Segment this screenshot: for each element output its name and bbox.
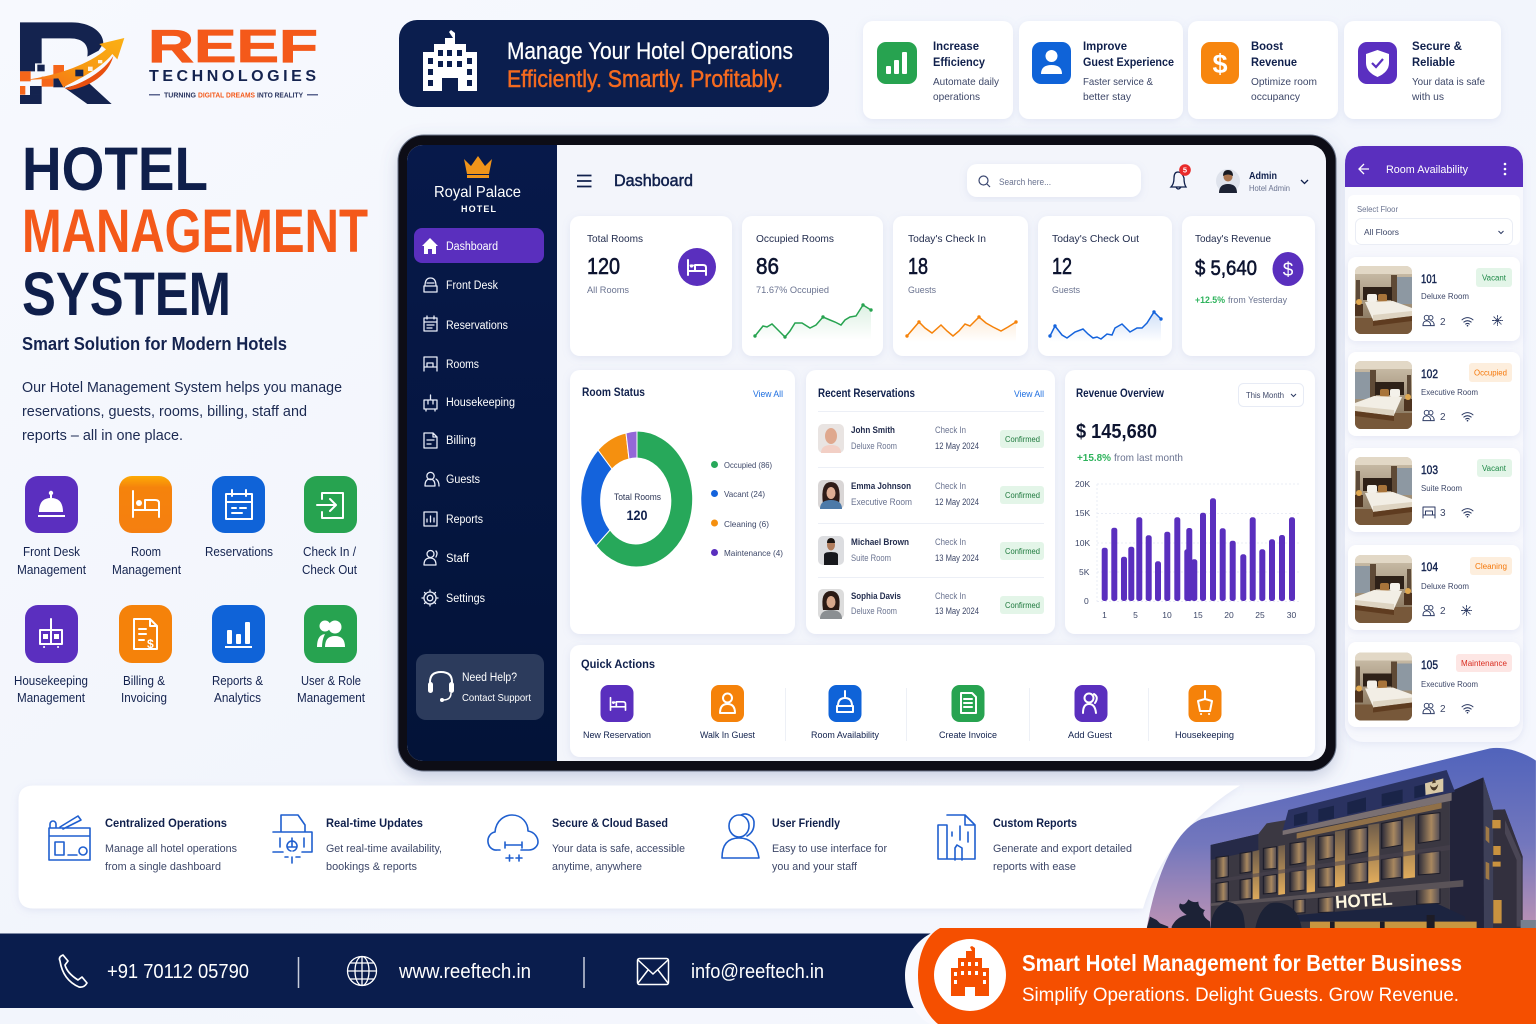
floor selector: All Floors xyxy=(1364,227,1399,237)
intro paragraph xyxy=(22,379,342,444)
reservation: Emma Johnson xyxy=(818,480,1044,509)
benefit text xyxy=(933,39,1000,103)
room card 103 xyxy=(1348,448,1520,532)
donut legend: Maintenance (4) xyxy=(724,548,783,558)
title: MANAGEMENT xyxy=(22,197,368,265)
benefit text: Reliable xyxy=(1412,55,1455,69)
reservation: Sophia Davis: Confirmed xyxy=(1005,601,1040,610)
cta headline: Smart Hotel Management for Better Business xyxy=(1022,950,1462,976)
room photo xyxy=(1355,266,1412,334)
bar chart: 0 xyxy=(1084,596,1089,606)
menu: settings: Settings xyxy=(446,593,485,605)
stat card: occupied rooms: 86 xyxy=(756,253,779,279)
item: centralized operations: from a single dashboard xyxy=(105,861,221,873)
menu: housekeeping xyxy=(424,395,515,411)
room card 104: Cleaning xyxy=(1475,562,1507,571)
entrance canopy xyxy=(1297,903,1465,922)
title: HOTEL xyxy=(22,135,208,203)
stat card: total rooms: All Rooms xyxy=(587,285,629,296)
room card 102: Executive Room xyxy=(1421,387,1478,397)
feature: reservations xyxy=(205,476,273,559)
panel: revenue overview: Revenue Overview xyxy=(1076,386,1165,400)
benefit text: better stay xyxy=(1083,91,1132,103)
panel header: Room Availability xyxy=(1386,164,1468,176)
banner sub-headline: Efficiently. Smartly. Profitably. xyxy=(507,66,783,93)
bar chart: 10 xyxy=(1162,610,1172,620)
feature: room: Management xyxy=(112,563,181,577)
feature: reports: Reports & xyxy=(212,674,264,688)
reservation: John Smith: Deluxe Room xyxy=(851,441,897,451)
feature: users: Management xyxy=(297,691,365,705)
admin profile: Hotel Admin xyxy=(1249,183,1290,193)
feature: check in / out xyxy=(302,476,357,577)
stat card: check in xyxy=(893,216,1028,356)
action: walk in guest xyxy=(700,685,755,740)
stat card: revenue: Today's Revenue xyxy=(1195,233,1271,245)
feature: users: User & Role xyxy=(301,674,361,688)
action: housekeeping: Housekeeping xyxy=(1175,730,1234,740)
title xyxy=(22,135,368,328)
panel: revenue overview: +15.8% xyxy=(1077,452,1112,464)
panel: recent reservations: View All xyxy=(1014,389,1044,400)
donut centre label: 120 xyxy=(626,507,648,523)
action: create invoice: Create Invoice xyxy=(939,730,997,740)
room card 104 xyxy=(1348,545,1520,630)
feature: billing: Invoicing xyxy=(121,691,167,705)
benefit card: guest experience xyxy=(1019,21,1183,119)
reservation: John Smith xyxy=(818,424,1044,453)
top storey windows xyxy=(1294,784,1425,826)
trees xyxy=(1147,899,1302,930)
windows xyxy=(1216,813,1440,913)
intro paragraph: reports – all in one place. xyxy=(22,427,183,444)
donut legend: Vacant (24) xyxy=(724,489,765,499)
room card 103: Suite Room xyxy=(1421,483,1462,493)
room card 102 xyxy=(1348,352,1520,436)
menu: housekeeping: Housekeeping xyxy=(446,397,515,409)
donut legend: Cleaning (6) xyxy=(724,519,769,529)
dashboard screen xyxy=(407,145,1326,761)
benefit text: Boost xyxy=(1251,39,1283,53)
benefit text: operations xyxy=(933,91,980,103)
menu: rooms: Rooms xyxy=(446,359,479,371)
feature: billing: $ xyxy=(147,637,154,651)
icon: bars xyxy=(877,42,917,84)
reservation: Michael Brown: Check In xyxy=(935,537,966,547)
stat card: check out: Today's Check Out xyxy=(1052,233,1139,245)
icon: crown xyxy=(464,156,492,178)
item: user friendly: Easy to use interface for xyxy=(772,843,887,855)
room card 102: Occupied xyxy=(1474,368,1507,378)
item: secure cloud: anytime, anywhere xyxy=(552,861,642,873)
reservation: Sophia Davis: 13 May 2024 xyxy=(935,606,979,616)
panel: quick actions xyxy=(570,645,1315,757)
item: user friendly: User Friendly xyxy=(772,816,840,830)
crest sign xyxy=(1425,778,1443,795)
room photo xyxy=(1355,652,1412,720)
feature: check in / out: Check In / xyxy=(303,545,356,559)
donut legend xyxy=(711,460,783,558)
stat card: revenue: from Yesterday xyxy=(1228,295,1287,306)
room card 105: 105 xyxy=(1421,658,1438,672)
month dropdown xyxy=(1238,384,1304,406)
logo wordmark REEF: REEF xyxy=(148,20,318,72)
benefit card: revenue xyxy=(1188,21,1338,119)
room card 105: 2 xyxy=(1440,704,1446,715)
hotel building photo xyxy=(1130,740,1536,930)
menu: rooms xyxy=(424,357,479,371)
panel: feature strip xyxy=(18,786,1240,908)
panel: revenue overview: $ 145,680 xyxy=(1076,420,1157,443)
room card 101: Vacant xyxy=(1482,274,1507,282)
contact bar xyxy=(0,934,950,1008)
sidebar xyxy=(407,145,557,761)
stat card: total rooms: 120 xyxy=(587,253,620,279)
reservation: John Smith: John Smith xyxy=(851,425,895,436)
icon: hotel badge xyxy=(934,939,1006,1011)
room card 103: 103 xyxy=(1421,463,1438,477)
menu: reservations: Reservations xyxy=(446,320,508,332)
room card 101: 2 xyxy=(1440,317,1446,328)
donut legend: Occupied (86) xyxy=(724,460,772,470)
reservation: Michael Brown: 13 May 2024 xyxy=(935,553,979,563)
feature: room: Room xyxy=(131,545,161,559)
reservation: Michael Brown: Suite Room xyxy=(851,553,891,563)
website: www.reeftech.in xyxy=(398,961,531,983)
cta sub-headline: Simplify Operations. Delight Guests. Grow Revenue. xyxy=(1022,984,1459,1006)
help box: Need Help? xyxy=(462,672,517,684)
item: custom reports: Generate and export detailed xyxy=(993,843,1132,855)
icon: user xyxy=(1032,42,1071,84)
reservation: Emma Johnson: 12 May 2024 xyxy=(935,497,979,507)
header bar: Dashboard xyxy=(614,171,693,190)
feature: billing xyxy=(119,605,172,705)
benefit text: Automate daily xyxy=(933,76,1000,88)
menu: dashboard active: Dashboard xyxy=(446,241,498,253)
stat card: revenue: $ 5,640 xyxy=(1195,257,1257,280)
month dropdown: This Month xyxy=(1246,390,1284,400)
subtitle: Smart Solution for Modern Hotels xyxy=(22,334,287,354)
room card 104: 104 xyxy=(1421,560,1438,574)
action: housekeeping xyxy=(1175,685,1234,740)
floor selector xyxy=(1348,195,1520,245)
sparkline: check out xyxy=(1048,310,1163,342)
menu: dashboard active xyxy=(414,228,544,263)
donut centre label xyxy=(614,494,661,520)
room card 103: Vacant xyxy=(1482,464,1507,473)
stat card: check in: Guests xyxy=(908,285,936,296)
room card 102: 102 xyxy=(1421,367,1438,381)
sparkline: check in xyxy=(905,315,1018,338)
floor selector: Select Floor xyxy=(1357,205,1398,214)
room photo xyxy=(1355,555,1412,623)
donut centre label: Total Rooms xyxy=(614,492,661,502)
room card 104: 2 xyxy=(1440,606,1446,617)
stat card: check out: 12 xyxy=(1052,253,1072,279)
reservation: Sophia Davis xyxy=(818,589,1044,619)
reservation: Michael Brown: Michael Brown xyxy=(851,537,909,548)
room card 105 xyxy=(1348,642,1520,727)
title: SYSTEM xyxy=(22,260,231,328)
logo tagline: DIGITAL DREAMS xyxy=(198,92,255,100)
item: centralized operations: Centralized Operations xyxy=(105,816,227,830)
stat card: occupied rooms: 71.67% Occupied xyxy=(756,285,829,296)
side windows xyxy=(1486,820,1502,923)
benefit text: Faster service & xyxy=(1083,76,1153,88)
feature: front desk: Front Desk xyxy=(23,545,81,559)
benefit text: Optimize room xyxy=(1251,76,1317,88)
feature: housekeeping xyxy=(14,605,88,705)
search box xyxy=(967,164,1141,197)
action: add guest: Add Guest xyxy=(1068,730,1113,740)
icon: mail xyxy=(638,958,668,984)
menu: staff: Staff xyxy=(446,553,470,565)
item: custom reports xyxy=(938,815,1132,873)
item: secure cloud: Secure & Cloud Based xyxy=(552,816,668,830)
reservation: Emma Johnson: Executive Room xyxy=(851,497,912,507)
menu: guests: Guests xyxy=(446,474,480,486)
stat card: check out xyxy=(1038,216,1172,356)
benefit text: Improve xyxy=(1083,39,1127,53)
stat card: check in: 18 xyxy=(908,253,928,279)
floor bands xyxy=(1211,845,1450,883)
icon: dollar badge: $ xyxy=(1283,260,1294,281)
menu: settings xyxy=(422,590,485,606)
hotel sign: HOTEL xyxy=(1335,889,1393,912)
sparkline: occupied xyxy=(753,303,873,340)
icon: notification bell: 5 xyxy=(1183,166,1187,174)
feature: reports: Analytics xyxy=(214,691,261,705)
room card 105: Executive Room xyxy=(1421,679,1478,689)
panel: revenue overview: from last month xyxy=(1114,452,1183,464)
benefit text xyxy=(1083,39,1174,103)
stat card: total rooms xyxy=(570,216,732,356)
search box: Search here... xyxy=(999,177,1051,188)
logo tagline: TURNING xyxy=(164,92,197,100)
stat card: revenue: +12.5% xyxy=(1195,295,1225,306)
action: create invoice xyxy=(939,685,997,740)
panel header xyxy=(1345,146,1523,187)
icon: dollar: $ xyxy=(1212,49,1228,79)
icon: shield xyxy=(1358,42,1397,84)
hero banner xyxy=(399,20,829,107)
room photo xyxy=(1355,457,1412,525)
bar chart: 5 xyxy=(1133,610,1138,620)
menu: reports: Reports xyxy=(446,514,483,526)
stat card: occupied rooms: Occupied Rooms xyxy=(756,233,834,245)
panel: room status: Room Status xyxy=(582,385,645,399)
menu: front desk xyxy=(424,278,498,292)
icon: hotel building xyxy=(423,30,477,91)
panel: room availability xyxy=(1345,146,1523,742)
bar chart: 30 xyxy=(1287,610,1296,620)
donut chart xyxy=(581,431,693,567)
banner headline: Manage Your Hotel Operations xyxy=(507,38,793,65)
logo: Reef Technologies xyxy=(20,20,318,104)
bar chart: 20K xyxy=(1075,479,1090,489)
admin profile: Admin xyxy=(1249,170,1277,182)
item: user friendly xyxy=(722,814,887,873)
item: secure cloud xyxy=(488,815,685,873)
bar chart: 10K xyxy=(1075,538,1090,548)
icon: globe xyxy=(348,956,376,986)
feature: reports xyxy=(212,605,265,705)
bar chart: 1 xyxy=(1102,610,1107,620)
room card 103: 3 xyxy=(1440,508,1446,519)
room card 102: 2 xyxy=(1440,412,1446,423)
item: centralized operations xyxy=(49,816,237,873)
panel: recent reservations: Recent Reservations xyxy=(818,386,915,400)
reservation: Emma Johnson: Emma Johnson xyxy=(851,481,911,492)
header bar xyxy=(577,164,1308,197)
menu: billing: Billing xyxy=(446,435,476,447)
hotel name xyxy=(435,186,520,212)
bar chart: 20 xyxy=(1224,610,1234,620)
item: real-time updates xyxy=(273,815,442,873)
benefit text: Guest Experience xyxy=(1083,55,1174,69)
panel: room status: View All xyxy=(753,389,783,400)
help box: Contact Support xyxy=(462,692,531,704)
bar chart xyxy=(1075,479,1300,620)
item: real-time updates: bookings & reports xyxy=(326,861,417,873)
benefit text: Efficiency xyxy=(933,55,985,69)
glowing pilasters xyxy=(1253,816,1415,902)
benefit card: efficiency xyxy=(863,21,1013,119)
item: real-time updates: Get real-time availability, xyxy=(326,843,442,855)
icon: bed badge xyxy=(678,248,716,286)
item: centralized operations: Manage all hotel operations xyxy=(105,843,237,855)
feature: reservations: Reservations xyxy=(205,545,273,559)
admin profile xyxy=(1216,169,1308,193)
feature: front desk xyxy=(17,476,86,577)
icon: phone xyxy=(59,955,87,987)
logo tagline: INTO REALITY xyxy=(257,92,303,100)
menu: reservations xyxy=(424,316,508,332)
menu: staff xyxy=(424,550,470,565)
reservation: Emma Johnson: Confirmed xyxy=(1005,491,1040,500)
panel: room status xyxy=(570,370,795,634)
menu: reports xyxy=(424,512,483,526)
feature: billing: Billing & xyxy=(123,674,166,688)
hotel name: Royal Palace xyxy=(434,184,521,201)
phone number: +91 70112 05790 xyxy=(107,961,249,983)
icon: dollar xyxy=(1201,42,1239,84)
benefit text xyxy=(1251,39,1317,103)
reservation: John Smith: Confirmed xyxy=(1005,435,1040,444)
bar chart: 25 xyxy=(1255,610,1265,620)
icon: notification bell xyxy=(1171,164,1191,189)
action: new reservation: New Reservation xyxy=(583,730,651,740)
intro paragraph: Our Hotel Management System helps you manage xyxy=(22,379,342,396)
room card 101 xyxy=(1348,257,1520,341)
cta banner xyxy=(905,928,1536,1024)
logo wordmark TECHNOLOGIES: TECHNOLOGIES xyxy=(149,68,316,85)
feature: users xyxy=(297,605,365,705)
reservation: Michael Brown: Confirmed xyxy=(1005,547,1040,556)
benefit text: occupancy xyxy=(1251,91,1301,103)
feature: front desk: Management xyxy=(17,563,86,577)
menu: billing xyxy=(424,433,476,448)
bar chart: 15 xyxy=(1193,610,1203,620)
benefit text: Increase xyxy=(933,39,979,53)
reservation: John Smith: 12 May 2024 xyxy=(935,441,979,451)
reservation: Sophia Davis: Deluxe Room xyxy=(851,606,897,616)
bar chart: 15K xyxy=(1075,508,1090,518)
benefit text: Your data is safe xyxy=(1412,76,1485,88)
panel: revenue overview xyxy=(1065,370,1315,634)
item: custom reports: Custom Reports xyxy=(993,816,1077,830)
stat card: revenue xyxy=(1182,216,1315,356)
intro paragraph: reservations, guests, rooms, billing, staff and xyxy=(22,403,307,420)
panel: recent reservations xyxy=(806,370,1055,634)
room card 101: Deluxe Room xyxy=(1421,291,1469,301)
item: secure cloud: Your data is safe, accessible xyxy=(552,843,685,855)
hotel name: HOTEL xyxy=(461,204,496,214)
menu: guests xyxy=(425,472,480,486)
stat card: check out: Guests xyxy=(1052,285,1080,296)
reservation: Sophia Davis: Check In xyxy=(935,591,966,601)
benefit card: security xyxy=(1344,21,1501,119)
item: real-time updates: Real-time Updates xyxy=(326,816,423,830)
action: room availability: Room Availability xyxy=(811,730,879,740)
feature: check in / out: Check Out xyxy=(302,563,357,577)
reservation: Michael Brown xyxy=(818,536,1044,565)
action: room availability xyxy=(811,685,879,740)
benefit text: Revenue xyxy=(1251,55,1297,69)
benefit text: with us xyxy=(1411,91,1444,103)
item: custom reports: reports with ease xyxy=(993,861,1076,873)
bar chart: 5K xyxy=(1079,567,1090,577)
stat card: check in: Today's Check In xyxy=(908,233,986,245)
feature: housekeeping: Housekeeping xyxy=(14,674,88,688)
email: info@reeftech.in xyxy=(691,961,824,983)
menu: front desk: Front Desk xyxy=(446,280,498,292)
item: user friendly: you and your staff xyxy=(772,861,858,873)
benefit text: Secure & xyxy=(1412,39,1462,53)
room card 105: Maintenance xyxy=(1461,659,1508,668)
feature: room xyxy=(112,476,181,577)
reservation: Emma Johnson: Check In xyxy=(935,481,966,491)
reservation: John Smith: Check In xyxy=(935,425,966,435)
stat card: total rooms: Total Rooms xyxy=(587,233,643,245)
logo tagline xyxy=(149,92,318,100)
action: walk in guest: Walk In Guest xyxy=(700,730,755,740)
action: new reservation xyxy=(583,685,651,740)
action: add guest xyxy=(1068,685,1113,740)
room card 101: 101 xyxy=(1421,272,1437,286)
reservation: Sophia Davis: Sophia Davis xyxy=(851,591,901,602)
help box xyxy=(416,654,544,720)
room photo xyxy=(1355,361,1412,429)
stat card: occupied rooms xyxy=(742,216,883,356)
room card 104: Deluxe Room xyxy=(1421,581,1469,591)
logo mark xyxy=(20,22,124,104)
feature: housekeeping: Management xyxy=(17,691,85,705)
benefit text xyxy=(1411,39,1485,103)
panel: quick actions: Quick Actions xyxy=(581,657,655,671)
